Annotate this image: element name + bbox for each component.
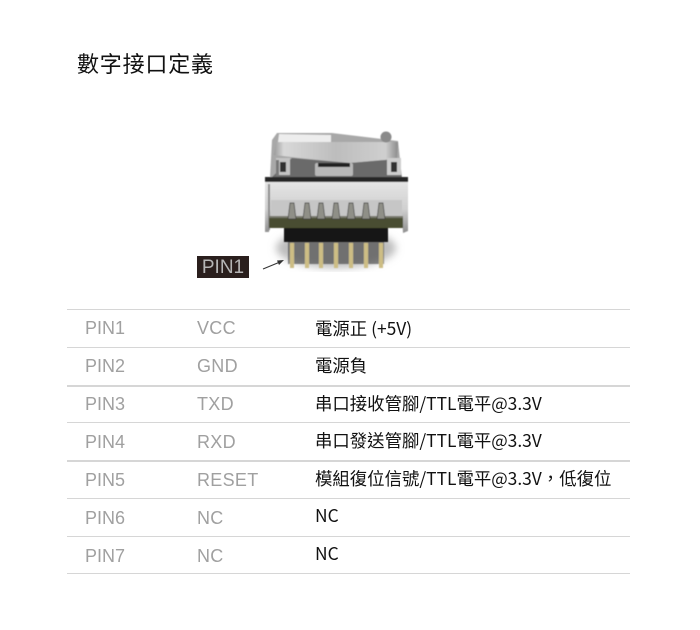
row PIN4 [85,428,542,453]
title: 數字接口定義 [77,52,214,77]
row PIN3: PIN3 [85,394,125,414]
row PIN5: 模組復位信號/TTL電平@3.3V，低復位 [315,466,611,491]
row PIN3: 串口接收管腳/TTL電平@3.3V [315,391,542,416]
top cover [270,133,402,178]
row PIN3 [85,391,542,416]
PIN1 label: PIN1 [202,257,244,278]
row PIN2: 電源負 [315,353,367,378]
row PIN1: 電源正 (+5V) [315,316,412,341]
row PIN5 [85,466,611,491]
row PIN4: RXD [197,432,236,452]
soft shadow under module [276,228,396,268]
row PIN4: PIN4 [85,432,125,452]
front shield [265,180,408,233]
product photo: module with pins [262,130,409,272]
row PIN5: RESET [197,470,259,490]
row PIN6 [85,503,339,528]
row PIN7: NC [315,541,339,566]
row PIN5: PIN5 [85,470,125,490]
row PIN7: PIN7 [85,546,125,566]
row PIN7 [85,541,339,566]
solder joints [288,203,385,219]
arrow pointing to pin 1 [263,260,284,269]
row PIN1 [85,316,412,341]
row PIN4: 串口發送管腳/TTL電平@3.3V [315,428,542,453]
circuit board [269,217,403,228]
row PIN2 [85,353,367,378]
row PIN1: PIN1 [85,318,125,338]
row PIN6: PIN6 [85,508,125,528]
row PIN2: PIN2 [85,356,125,376]
row PIN6: NC [197,508,224,528]
pin definition table [67,309,630,574]
row PIN6: NC [315,503,339,528]
row PIN1: VCC [197,318,236,338]
gold pins [290,243,383,268]
row PIN7: NC [197,546,224,566]
row PIN2: GND [197,356,238,376]
row PIN3: TXD [197,394,234,414]
black pin header [284,228,388,242]
